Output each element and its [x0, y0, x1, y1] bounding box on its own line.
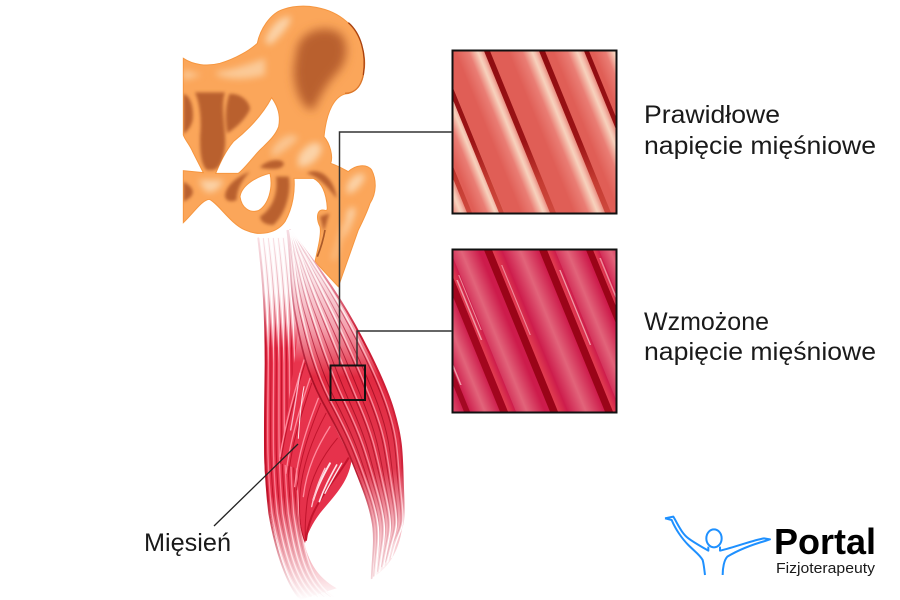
- panel: increased muscle tension: [452, 248, 618, 414]
- connector: increased tension: [357, 331, 452, 365]
- logo wordmark: Portal: [774, 521, 876, 562]
- logo tagline: Fizjoterapeuty: [776, 560, 876, 577]
- back muscle: [258, 237, 337, 600]
- magnified area marker: [330, 366, 365, 400]
- bone shading and highlights: [183, 17, 365, 260]
- label: normal tension: napięcie mięśniowe: [644, 132, 876, 160]
- label: increased tension: [644, 308, 876, 366]
- label: increased tension: Wzmożone: [644, 308, 769, 336]
- illustration: hamstring muscles: [258, 230, 404, 600]
- bright fibre highlights: [291, 373, 342, 507]
- label: normal tension: [644, 101, 876, 160]
- panel: normal muscle tension: [452, 50, 618, 214]
- middle muscle: [280, 330, 352, 543]
- front muscle: [287, 230, 404, 578]
- label: muscle: Mięsień: [144, 529, 231, 557]
- label: increased tension: napięcie mięśniowe: [644, 338, 876, 366]
- label: normal tension: Prawidłowe: [644, 101, 780, 129]
- illustration: hip bone and femur: [183, 6, 375, 287]
- icon: figure with raised arms: [665, 517, 770, 575]
- pointer line to muscle: [214, 444, 298, 526]
- connector: normal tension: [340, 132, 452, 365]
- logo: Portal Fizjoterapeuty: [665, 517, 876, 577]
